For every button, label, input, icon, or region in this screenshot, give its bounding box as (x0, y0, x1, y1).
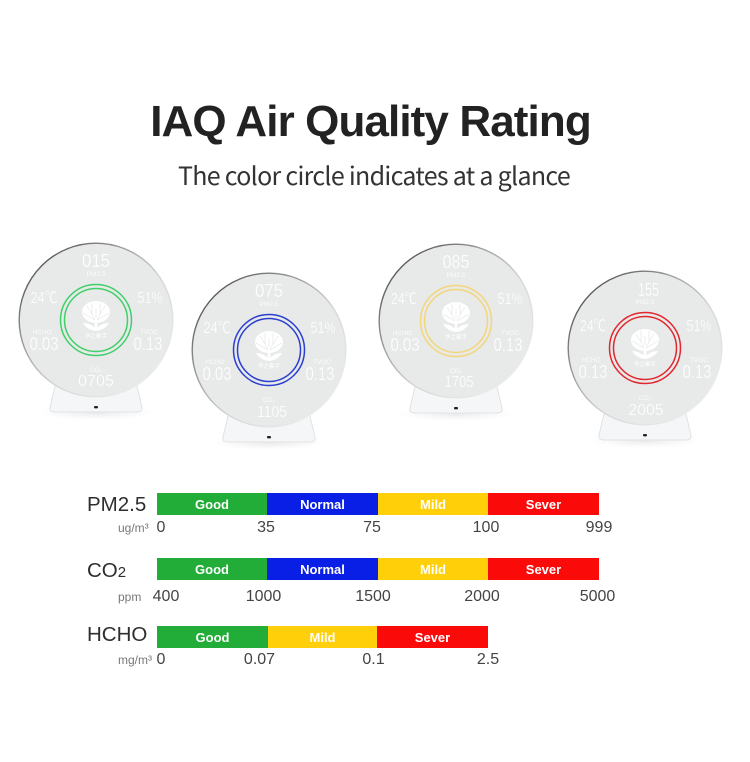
readings: 24℃ (580, 318, 606, 335)
color ring (420, 286, 492, 356)
base indicator (267, 436, 271, 438)
PM2.5 ticks: 100 (473, 519, 499, 536)
readings: 0.03 (202, 364, 232, 384)
device: red, severe air quality (568, 271, 722, 448)
device: yellow, mild air quality (379, 244, 533, 421)
color ring (60, 284, 132, 356)
CO2 segment: good: Good (195, 562, 229, 577)
tree logo: 华之都手 (634, 360, 656, 368)
readings: 0.13 (306, 364, 334, 384)
device face (192, 273, 346, 427)
readings: 51% (138, 290, 162, 307)
scale: CO2 (87, 558, 615, 605)
readings: TVOC (140, 329, 158, 336)
readings: 51% (310, 320, 336, 337)
device base (50, 378, 142, 412)
CO2 segment: mild (378, 558, 488, 580)
CO2 ticks (153, 588, 615, 605)
device base (599, 406, 691, 440)
color ring (610, 312, 680, 384)
tree logo: 华之都手 (445, 333, 467, 341)
readings: 0.13 (682, 362, 712, 382)
device: green, good air quality (19, 243, 173, 420)
readings: 0.13 (134, 334, 162, 354)
readings: 1705 (444, 374, 474, 391)
HCHO segment: mild (268, 626, 377, 648)
readings: 0.13 (578, 362, 608, 382)
tree logo (255, 331, 283, 370)
readings: HCHO (32, 329, 52, 336)
readings (202, 281, 336, 421)
tree logo (631, 329, 659, 368)
CO2 unit: ppm (118, 590, 141, 604)
CO2 segment: good (157, 558, 267, 580)
PM2.5 ticks: 999 (586, 519, 612, 536)
devices illustration (18, 242, 722, 446)
CO2 segment: sever: Sever (526, 562, 561, 577)
device face (379, 244, 533, 398)
readings: 0.03 (30, 334, 58, 354)
tree logo: 华之都手 (258, 362, 280, 370)
HCHO ticks: 2.5 (477, 651, 499, 668)
PM2.5 segment: good (157, 493, 267, 515)
readings: 155 (638, 280, 659, 300)
color ring (234, 314, 304, 386)
CO2 ticks: 400 (153, 588, 179, 605)
scale: HCHO (87, 622, 499, 668)
title: IAQ Air Quality Rating (150, 97, 591, 146)
readings: 24℃ (30, 290, 58, 307)
readings: 1105 (257, 404, 287, 421)
PM2.5 segment: sever (488, 493, 599, 515)
readings: 0.03 (390, 335, 420, 355)
scale: PM2.5 (87, 493, 612, 536)
tree logo (82, 301, 110, 340)
readings: 24℃ (391, 291, 417, 308)
readings: HCHO (392, 330, 412, 337)
base indicator (643, 434, 647, 436)
readings (390, 252, 522, 391)
readings: PM2.5 (636, 299, 655, 306)
base indicator (94, 406, 98, 408)
HCHO segment: sever: Sever (415, 630, 450, 645)
readings: CO₂ (450, 368, 463, 375)
readings (578, 280, 712, 419)
PM2.5 segment: good: Good (195, 497, 229, 512)
PM2.5 segment: normal (267, 493, 378, 515)
device face (568, 271, 722, 425)
readings: 0705 (78, 373, 114, 390)
PM2.5 segment: sever: Sever (526, 497, 561, 512)
CO2 segment: normal: Normal (300, 562, 345, 577)
readings: TVOC (690, 357, 708, 364)
readings: CO₂ (639, 395, 652, 402)
readings: 24℃ (204, 320, 230, 337)
PM2.5 ticks: 0 (157, 519, 165, 536)
device face (19, 243, 173, 397)
readings: HCHO (205, 359, 225, 366)
HCHO unit: mg/m³ (118, 653, 152, 667)
device: blue, normal air quality (192, 273, 346, 450)
HCHO segment: sever (377, 626, 488, 648)
HCHO segment: good (157, 626, 268, 648)
PM2.5 ticks: 75 (363, 519, 381, 536)
tree logo (442, 302, 470, 341)
readings: PM2.5 (260, 301, 279, 308)
HCHO segment: mild: Mild (310, 630, 336, 645)
PM2.5 ticks (157, 519, 612, 536)
PM2.5 label: PM2.5 (87, 493, 146, 516)
readings: 0.13 (494, 335, 522, 355)
base indicator (454, 407, 458, 409)
readings: 015 (82, 251, 110, 271)
readings: TVOC (501, 330, 519, 337)
HCHO ticks: 0.07 (244, 651, 275, 668)
CO2 segment: normal (267, 558, 378, 580)
HCHO segment: good: Good (196, 630, 229, 645)
tree logo: 华之都手 (85, 332, 107, 340)
device base (223, 408, 315, 442)
readings: 51% (686, 318, 712, 335)
HCHO label: HCHO (87, 622, 147, 646)
PM2.5 segment: mild (378, 493, 488, 515)
readings: TVOC (313, 359, 331, 366)
readings: 075 (255, 281, 283, 301)
PM2.5 ticks: 35 (257, 519, 275, 536)
readings: 51% (498, 291, 522, 308)
PM2.5 unit: ug/m³ (118, 520, 149, 534)
readings: HCHO (581, 357, 601, 364)
readings (30, 251, 162, 390)
readings: PM2.5 (87, 271, 106, 278)
subtitle: The color circle indicates at a glance (178, 157, 570, 193)
HCHO ticks: 0 (157, 651, 165, 668)
PM2.5 segment: mild: Mild (420, 497, 446, 512)
CO2 segment: sever (488, 558, 599, 580)
CO2 ticks: 1000 (246, 588, 281, 605)
readings: PM2.5 (447, 272, 466, 279)
readings: 2005 (628, 402, 664, 419)
CO2 ticks: 5000 (580, 588, 615, 605)
readings: 085 (442, 252, 470, 272)
HCHO ticks (157, 651, 499, 668)
CO2 segment: mild: Mild (420, 562, 446, 577)
device base (410, 379, 502, 413)
readings: CO₂ (263, 397, 276, 404)
readings: CO₂ (90, 367, 103, 374)
CO2 ticks: 1500 (355, 588, 391, 605)
HCHO ticks: 0.1 (362, 651, 385, 668)
PM2.5 segment: normal: Normal (300, 497, 345, 512)
CO2 label: CO2 (87, 559, 126, 582)
CO2 ticks: 2000 (464, 588, 500, 605)
